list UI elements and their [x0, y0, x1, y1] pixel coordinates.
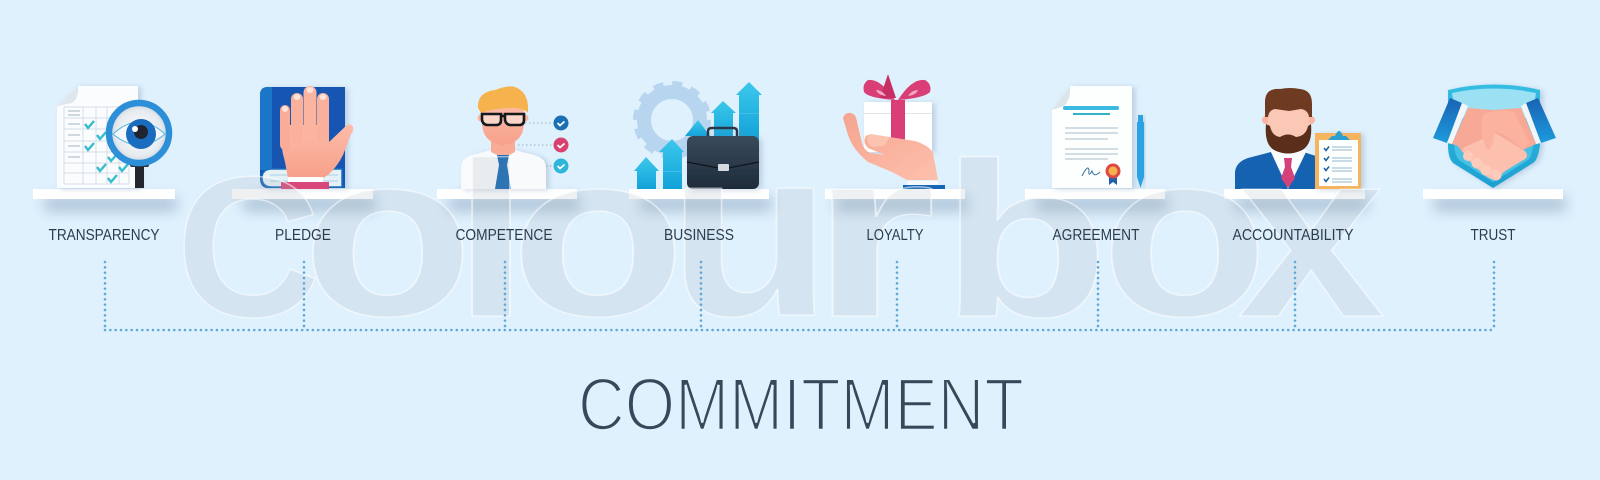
- dotted connectors: [518, 123, 553, 166]
- glasses: [482, 114, 524, 125]
- shirt: [461, 150, 546, 189]
- labels: PLEDGE: [275, 227, 331, 244]
- face: [1268, 100, 1309, 142]
- sleeves: [1433, 98, 1556, 143]
- badges: [554, 116, 568, 174]
- icon: accountability man and clipboard: [1235, 88, 1361, 189]
- watermark: o: [302, 103, 474, 365]
- labels: COMPETENCE: [456, 227, 552, 244]
- tie: [495, 155, 511, 189]
- labels: TRANSPARENCY: [48, 227, 160, 244]
- labels: BUSINESS: [664, 227, 734, 244]
- tie: [1281, 158, 1295, 188]
- neck: [491, 135, 515, 158]
- briefcase: [687, 128, 759, 189]
- watermark: b: [941, 117, 1109, 363]
- watermark: u: [668, 97, 832, 366]
- shield: [1448, 84, 1540, 188]
- watermark: l: [453, 117, 529, 363]
- ribbon and bow: [864, 74, 930, 140]
- hair: [478, 86, 528, 113]
- growth arrows: [634, 82, 762, 189]
- icon: transparency document and magnifier: [57, 86, 169, 188]
- document with check grid: [57, 86, 138, 188]
- beard: [1266, 124, 1311, 154]
- labels: [48, 227, 1516, 244]
- arrow highlights: [663, 113, 759, 172]
- face: [482, 104, 524, 145]
- icon: pledge hand on book: [260, 86, 353, 189]
- gear: [636, 84, 708, 156]
- ears: [1262, 116, 1315, 124]
- icon: loyalty hand with gift: [843, 74, 945, 189]
- gift box: [864, 102, 932, 152]
- cuff: [281, 177, 329, 189]
- cuffs: [1447, 103, 1541, 144]
- hand: [280, 86, 353, 178]
- magnifier lens with eye: [109, 103, 169, 163]
- watermark: o: [1101, 103, 1268, 365]
- labels: AGREEMENT: [1052, 227, 1140, 244]
- icon: competence person: [461, 86, 568, 189]
- shelves: [33, 189, 1566, 211]
- watermark: [176, 97, 1385, 367]
- seal: [1106, 164, 1120, 185]
- suit: [1235, 151, 1316, 189]
- icon: business gear, arrows, briefcase: [634, 82, 762, 189]
- cuff: [903, 181, 945, 189]
- hair: [1265, 88, 1312, 117]
- clipboard: [1315, 131, 1361, 189]
- book: [260, 87, 345, 188]
- icon: agreement document and pen: [1052, 86, 1144, 188]
- title: COMMITMENT: [578, 363, 1024, 446]
- labels: LOYALTY: [866, 227, 924, 244]
- collar: [1270, 150, 1307, 189]
- watermark: r: [810, 100, 936, 367]
- icon: trust handshake and shield: [1433, 84, 1556, 188]
- magnifier handle: [130, 163, 149, 188]
- labels: TRUST: [1470, 227, 1516, 244]
- watermark: C: [176, 136, 320, 359]
- labels: ACCOUNTABILITY: [1232, 227, 1354, 244]
- dotted connector lines: [105, 262, 1494, 330]
- clasped hands: [1452, 108, 1536, 180]
- hand: [843, 113, 938, 180]
- watermark: o: [510, 104, 686, 365]
- watermark: x: [1238, 100, 1385, 367]
- ears: [478, 114, 528, 122]
- document: [1052, 86, 1132, 188]
- pen: [1137, 115, 1144, 188]
